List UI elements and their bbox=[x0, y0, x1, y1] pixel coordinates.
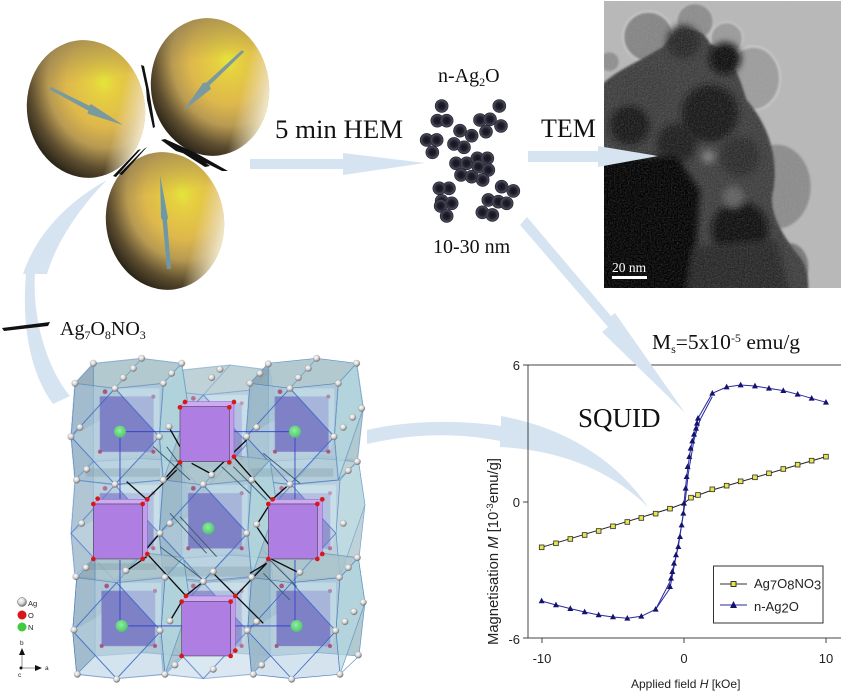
label: Ag7O8NO3: NO bbox=[111, 318, 140, 340]
label: n-Ag2O: n-Ag bbox=[438, 65, 479, 87]
axes bbox=[523, 365, 841, 643]
x tick labels: -10 bbox=[533, 651, 551, 666]
x tick labels: 0 bbox=[680, 651, 688, 666]
y axis title: -3 bbox=[485, 503, 496, 512]
y tick labels: -6 bbox=[508, 632, 520, 647]
crystal axes bbox=[18, 640, 49, 679]
label: TEM: TEM bbox=[541, 114, 596, 143]
nitrate slab: right bbox=[161, 139, 228, 171]
sphere: left bbox=[18, 32, 154, 186]
arrow: TEM bbox=[528, 146, 658, 167]
label: Ms value: M bbox=[652, 330, 671, 354]
label: Ms value: s bbox=[671, 342, 676, 356]
crystal axes: b bbox=[20, 640, 24, 647]
y tick labels bbox=[508, 358, 520, 647]
y tick labels: 6 bbox=[513, 358, 520, 373]
nitrate network bonds bbox=[127, 427, 300, 623]
chart legend: 7 bbox=[770, 578, 777, 592]
spheres with magnetic moments bbox=[18, 10, 278, 298]
series bbox=[539, 382, 829, 621]
legend: N: N bbox=[28, 623, 33, 632]
chart legend: 8 bbox=[787, 578, 794, 592]
Ag7O8NO3 markers bbox=[539, 454, 828, 550]
chart legend: 3 bbox=[814, 578, 821, 592]
x axis title: Applied field H [kOe] bbox=[631, 677, 740, 691]
atom legend and axes bbox=[18, 598, 49, 679]
arrow: crystal to spheres bbox=[23, 180, 107, 404]
front cells bbox=[71, 358, 365, 679]
purple O8 cubes bbox=[93, 402, 322, 656]
nanoparticle cluster bbox=[420, 99, 520, 223]
label: Ag7O8NO3: 8 bbox=[105, 328, 111, 342]
nitrate slab: lower left bbox=[113, 147, 147, 177]
chart legend: NO bbox=[794, 576, 814, 591]
rear cells bbox=[71, 365, 365, 679]
n-Ag2O reverse branch bbox=[656, 397, 712, 609]
y axis title: Magnetisation M [10 bbox=[486, 512, 502, 645]
sphere: top right bbox=[142, 10, 278, 164]
arrow: crystal to SQUID bbox=[367, 416, 648, 507]
x tick labels bbox=[533, 651, 833, 666]
label: n-Ag2O: O bbox=[485, 65, 500, 87]
label: Ag7O8NO3: 3 bbox=[140, 328, 146, 342]
chart legend: 2 bbox=[781, 600, 789, 616]
arrow: n-Ag2O to magnetisation curve bbox=[520, 217, 685, 413]
label: Ms value: -5 bbox=[731, 331, 741, 345]
label: SQUID: SQUID bbox=[578, 403, 661, 433]
crystal structure bbox=[68, 355, 367, 683]
chart legend bbox=[714, 566, 823, 623]
moment arrow: left bbox=[49, 87, 123, 125]
magnetisation chart bbox=[485, 217, 841, 691]
label: Ms value: =5x10 bbox=[676, 330, 731, 354]
scale bar: 20 nm: 20 nm bbox=[612, 260, 647, 275]
label: Ag7O8NO3: O bbox=[90, 318, 105, 340]
nitrogen atoms bbox=[114, 426, 303, 632]
rear gray bonds bbox=[153, 447, 300, 600]
chart legend: O bbox=[777, 576, 787, 591]
chart legend: Ag bbox=[754, 576, 770, 591]
legend: Ag: Ag bbox=[28, 599, 37, 608]
crystal axes: c bbox=[18, 672, 22, 679]
Ag7O8NO3 line bbox=[542, 457, 826, 547]
moment arrow: bottom bbox=[160, 175, 171, 269]
chart legend: n-Ag bbox=[754, 599, 781, 614]
N-O bonds bbox=[120, 432, 297, 626]
y axis title: emu/g] bbox=[486, 458, 502, 503]
label: Ag7O8NO3: Ag bbox=[60, 318, 84, 340]
sphere: bottom bbox=[97, 144, 233, 298]
n-Ag2O markers bbox=[539, 382, 829, 621]
x tick labels: 10 bbox=[819, 651, 833, 666]
label: Ag7O8NO3: 7 bbox=[84, 328, 90, 342]
rear strips bbox=[83, 468, 333, 577]
oxygen atoms bbox=[91, 400, 325, 658]
nitrate slab: upper bbox=[141, 65, 155, 128]
silver atoms bbox=[68, 355, 367, 683]
crystal axes: a bbox=[45, 665, 49, 672]
label: 5 min HEM: 5 min HEM bbox=[275, 114, 403, 144]
chart legend: O bbox=[789, 599, 799, 614]
y tick labels: 0 bbox=[513, 495, 520, 510]
label: 10-30 nm: 10-30 nm bbox=[433, 236, 511, 258]
TEM micrograph bbox=[597, 1, 841, 297]
label: n-Ag2O: 2 bbox=[479, 75, 485, 89]
legend: O: O bbox=[28, 611, 34, 620]
n-Ag2O loop lines bbox=[542, 385, 826, 618]
moment arrow: top right bbox=[183, 50, 244, 111]
label: Ms value: emu/g bbox=[741, 330, 800, 354]
arrow: 5 min HEM bbox=[250, 153, 425, 175]
slab icon: Ag7O8NO3 bbox=[2, 322, 50, 331]
